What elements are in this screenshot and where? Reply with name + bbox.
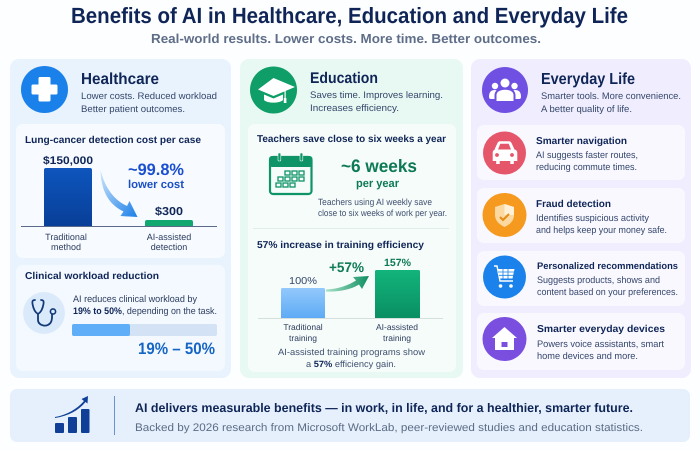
bar chart: cost per case: Traditional (45, 232, 87, 242)
fraud title: Fraud detection (536, 199, 611, 210)
bar chart: cost per case: AI-assisted (147, 232, 191, 242)
workload range value: 19% – 50% (138, 340, 215, 358)
card heading: six weeks: Teachers save close to six weeks a year (257, 134, 446, 145)
title: Benefits of AI in Healthcare, Education and Everyday Life (71, 3, 628, 28)
arrow: efficiency gain (326, 276, 369, 292)
card: fraud detection (477, 188, 685, 243)
panel: healthcare (10, 59, 231, 378)
navigation description: AI suggests faster routes, (536, 150, 638, 161)
fraud description: and helps keep your money safe. (536, 225, 667, 236)
stat: six weeks per year: per year (356, 178, 399, 190)
footer headline: AI delivers measurable benefits — in work, in life, and for a healthier, smarter future. (135, 401, 633, 415)
bar chart: training efficiency: 157% (384, 257, 412, 269)
icon: shield (482, 193, 526, 237)
card: smarter navigation (477, 125, 685, 180)
callout: plus 57%: +57% (329, 259, 365, 275)
bar chart: cost per case: method (51, 242, 81, 252)
workload text: AI reduces clinical workload by (73, 294, 197, 305)
six weeks description: Teachers using AI weekly save (318, 197, 432, 207)
callout: 99.8% lower cost: lower cost (128, 179, 184, 191)
icon: people (482, 67, 528, 113)
recommendations description: content based on your preferences. (537, 287, 678, 298)
training description: a 57% efficiency gain. (306, 359, 396, 369)
card: smarter everyday devices (477, 313, 685, 370)
fraud description: Identifies suspicious activity (536, 213, 649, 224)
bar chart: training efficiency: training (383, 333, 411, 343)
icon: house (482, 317, 526, 361)
fraud description (536, 213, 667, 236)
everyday life description: A better quality of life. (541, 104, 632, 115)
education description (310, 90, 443, 114)
heading: everyday life: Everyday Life (541, 71, 635, 88)
training description: AI-assisted training programs show (278, 347, 426, 357)
education description: Saves time. Improves learning. (310, 90, 443, 101)
healthcare description: Lower costs. Reduced workload (81, 91, 217, 102)
heading: education: Education (310, 70, 378, 87)
training description (278, 347, 426, 369)
bar chart: training efficiency: Traditional (283, 322, 323, 332)
icon: car (483, 132, 526, 174)
card heading: training efficiency: 57% increase in training efficiency (257, 240, 424, 251)
bar chart: cost per case: $300 (155, 206, 183, 218)
bar chart: cost per case: detection (151, 242, 187, 252)
navigation description (536, 150, 638, 173)
stat: six weeks per year: ~6 weeks (341, 156, 417, 176)
card: education stats (248, 124, 456, 372)
card: clinical workload reduction (16, 265, 225, 371)
icon: medical cross (21, 66, 68, 113)
everyday life description: Smarter tools. More convenience. (541, 91, 681, 102)
progress bar (72, 324, 217, 336)
panel: education (240, 59, 463, 378)
everyday life description (541, 91, 681, 115)
icon: stethoscope (23, 292, 65, 334)
six weeks description: close to six weeks of work per year. (318, 208, 447, 218)
card: personalized recommendations (477, 251, 685, 306)
workload text (73, 294, 217, 317)
bar chart: training efficiency (258, 257, 443, 343)
panel: everyday life (471, 59, 691, 378)
recommendations description (537, 275, 678, 298)
recommendations title: Personalized recommendations (537, 261, 678, 272)
bar chart: training efficiency: AI-assisted (376, 322, 418, 332)
six weeks description (318, 197, 447, 218)
devices description: Powers voice assistants, smart (537, 339, 664, 350)
icon: graduation cap (250, 66, 297, 114)
healthcare description: Better patient outcomes. (81, 104, 185, 115)
devices description: home devices and more. (537, 351, 638, 362)
icon: rising bar chart (55, 396, 90, 433)
devices title: Smarter everyday devices (537, 324, 665, 335)
devices description (537, 339, 664, 362)
footer banner (10, 389, 690, 442)
footer source note: Backed by 2026 research from Microsoft WorkLab, peer-reviewed studies and education statistics. (135, 422, 643, 434)
bar chart: cost per case (21, 155, 217, 252)
bar chart: training efficiency: training (289, 333, 317, 343)
subtitle: Real-world results. Lower costs. More time. Better outcomes. (151, 31, 541, 46)
navigation description: reducing commute times. (536, 162, 637, 173)
bar chart: training efficiency: 100% (289, 276, 317, 287)
heading: healthcare: Healthcare (81, 71, 159, 88)
callout: 99.8% lower cost: ~99.8% (128, 161, 184, 179)
education description: Increases efficiency. (310, 103, 399, 114)
bar chart: cost per case: $150,000 (43, 155, 93, 167)
arrow: cost drop (100, 170, 138, 217)
healthcare description (81, 91, 217, 115)
card: lung-cancer detection cost (16, 124, 225, 258)
card heading: Lung-cancer detection cost per case (25, 135, 201, 146)
navigation title: Smarter navigation (536, 136, 627, 147)
recommendations description: Suggests products, shows and (537, 275, 660, 286)
workload text: 19% to 50%, depending on the task. (73, 306, 217, 317)
callout: 99.8% lower cost (128, 161, 184, 191)
icon: calendar (269, 153, 312, 194)
icon: shopping cart (483, 256, 526, 298)
card heading: Clinical workload reduction (25, 271, 159, 282)
stat: six weeks per year (341, 156, 417, 190)
